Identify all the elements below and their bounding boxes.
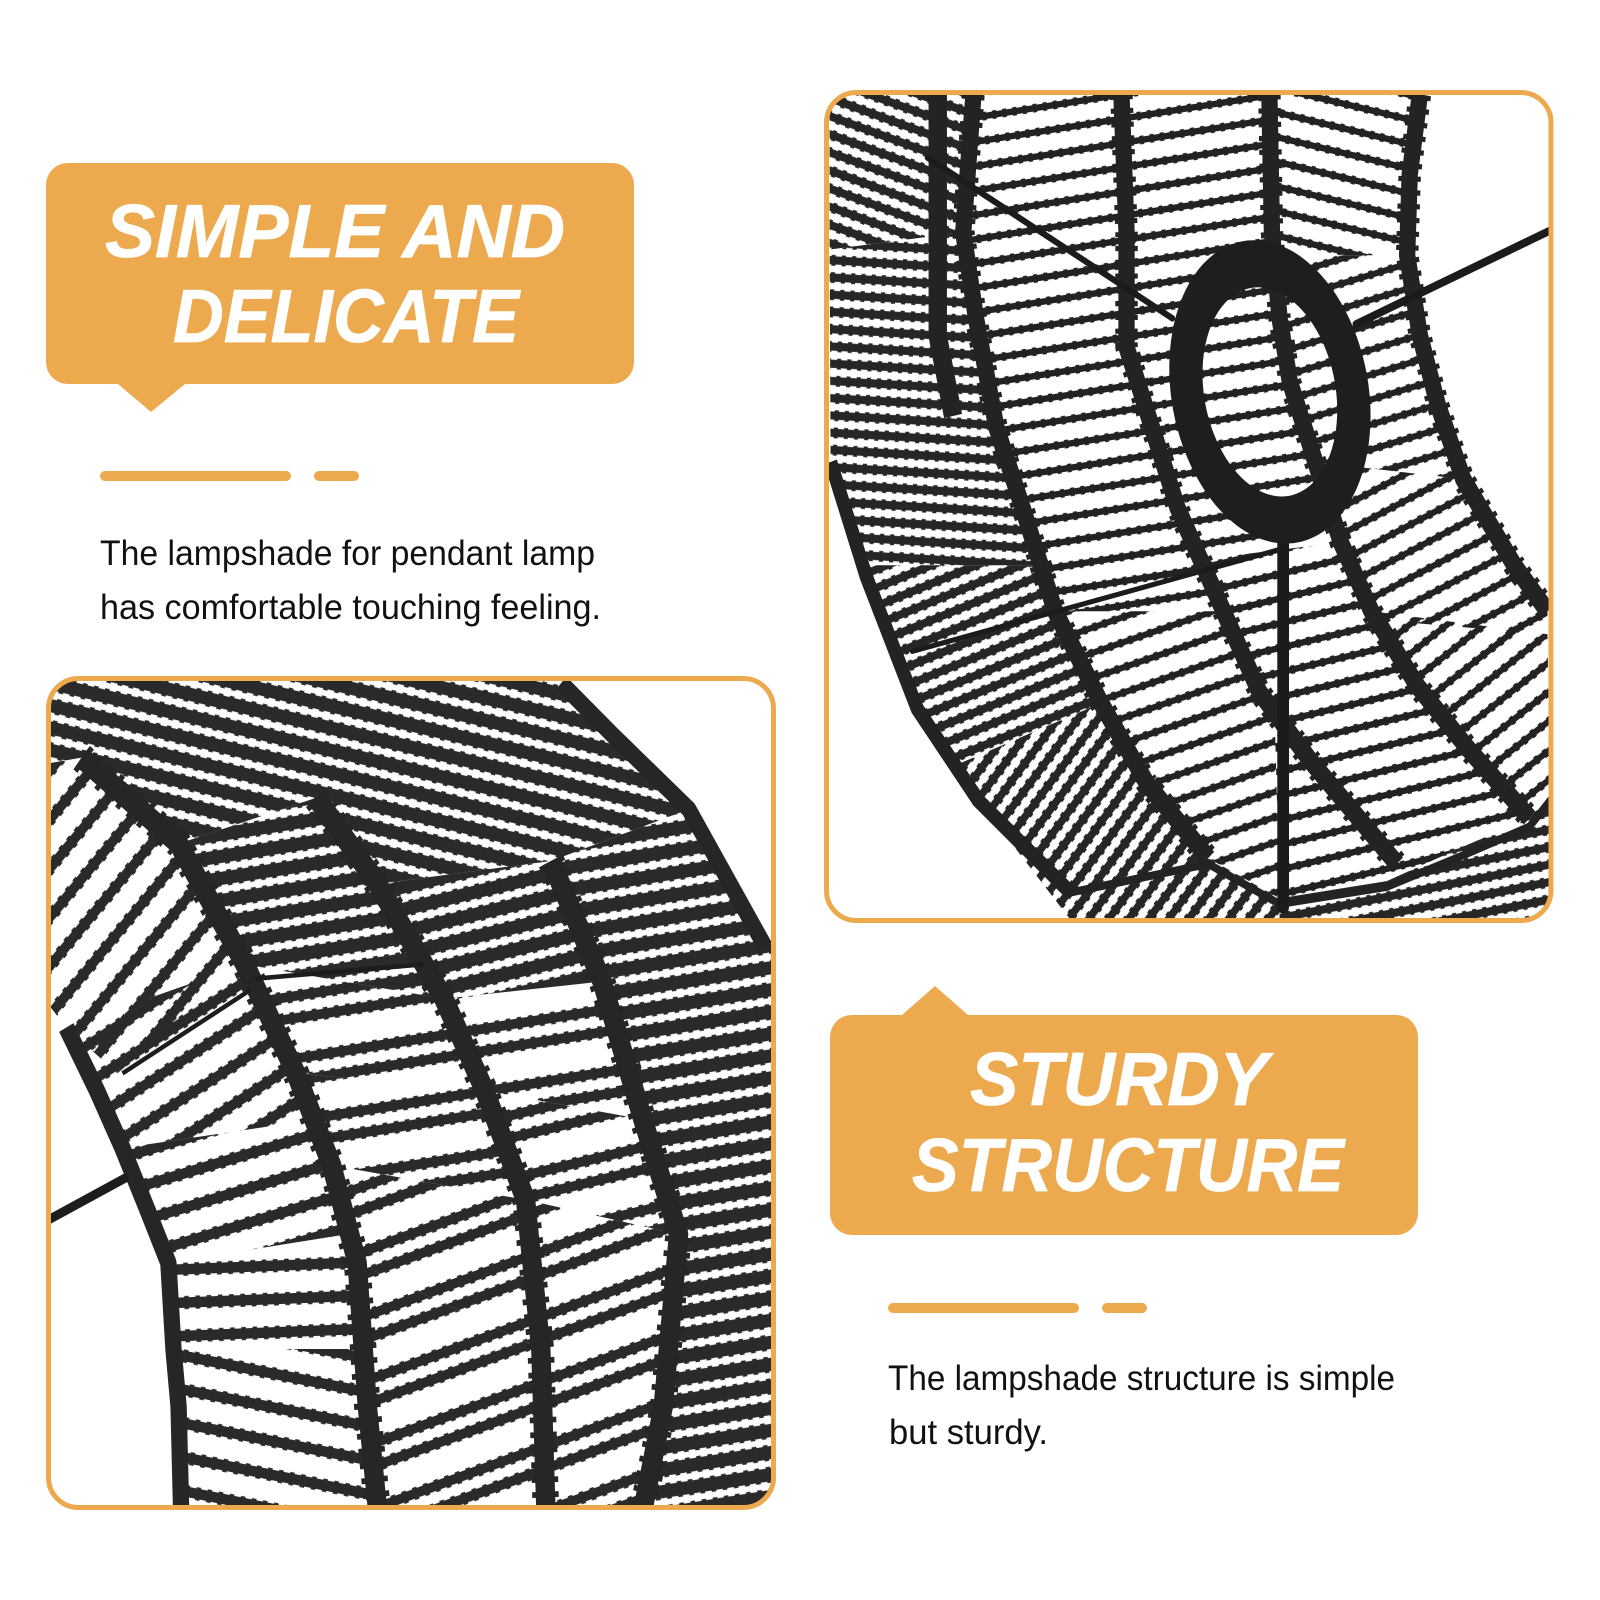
callout: simple and delicate: DELICATE — [173, 274, 521, 358]
callout: sturdy structure — [830, 986, 1418, 1235]
panel border — [826, 92, 1551, 920]
metal ring — [1169, 240, 1371, 544]
photo: woven band — [48, 677, 773, 1510]
photo: woven ring interior — [830, 94, 1553, 920]
woven rope sections — [48, 677, 773, 1510]
text block: pendant lamp description: The lampshade for pendant lamp — [100, 534, 595, 573]
callout: simple and delicate — [46, 163, 634, 412]
text block: structure description: The lampshade structure is simple — [888, 1359, 1395, 1398]
accent rule: bottom right — [888, 1303, 1147, 1313]
panel: bottom left lampshade close-up — [48, 677, 774, 1510]
panel border — [48, 678, 774, 1508]
woven rope sections — [830, 94, 1550, 920]
rope ribs — [66, 683, 765, 1510]
text block: structure description — [888, 1359, 1395, 1452]
panel: top right lampshade close-up — [826, 92, 1553, 920]
metal wires — [912, 158, 1553, 907]
callout: simple and delicate: SIMPLE AND — [105, 189, 565, 273]
callout: sturdy structure: STURDY — [970, 1037, 1274, 1121]
rope ribs — [831, 94, 1550, 904]
text block: pendant lamp description — [100, 534, 601, 627]
text block: pendant lamp description: has comfortable touching feeling. — [100, 588, 601, 627]
metal wires — [48, 964, 423, 1220]
callout: sturdy structure: STRUCTURE — [912, 1123, 1346, 1207]
text block: structure description: but sturdy. — [889, 1413, 1048, 1452]
accent rule: top left — [100, 471, 359, 481]
